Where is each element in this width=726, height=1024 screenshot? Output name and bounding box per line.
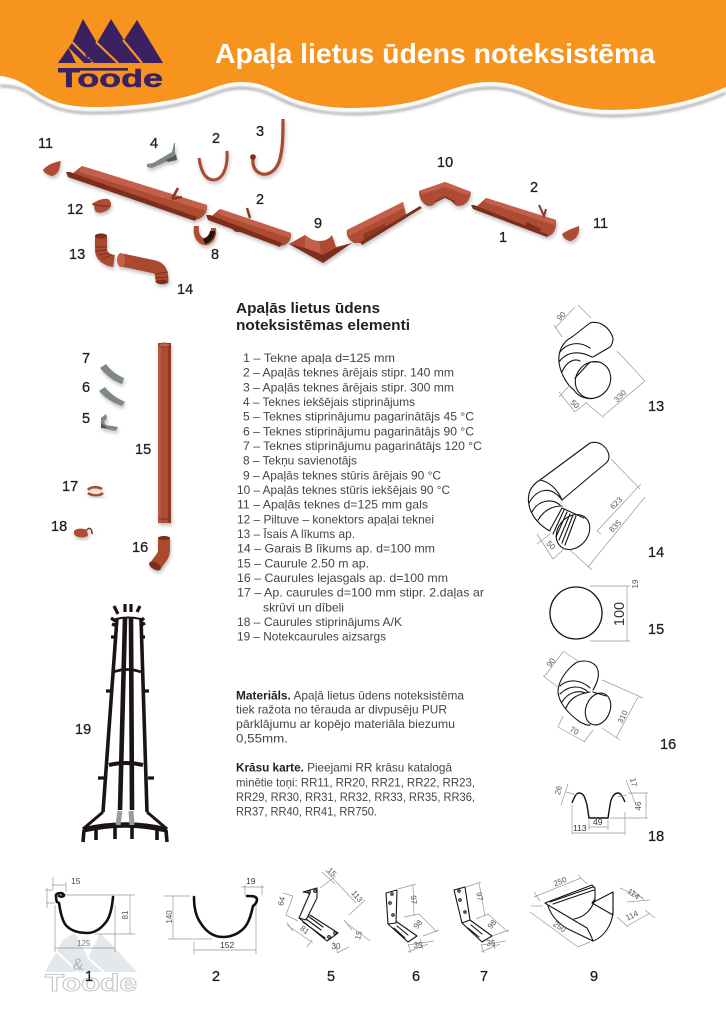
- technical drawing 18: 17: [628, 777, 639, 788]
- part number labels: left column: 17: [62, 479, 78, 495]
- technical drawing 13: 50: [568, 398, 581, 411]
- icon: connector 8: [194, 226, 216, 245]
- text block: colour chart: RR37, RR40, RR41, RR750.: [236, 805, 377, 819]
- icon: downpipe guard 19: [83, 604, 167, 842]
- icon: hook 2: [199, 151, 227, 180]
- text block: colour chart: [236, 761, 475, 819]
- technical drawing 16: 90: [545, 656, 558, 669]
- icon: pipe elbow 14: [117, 253, 168, 284]
- parts list: [237, 351, 484, 644]
- technical drawing 16: 310: [616, 708, 630, 725]
- text block: material: [236, 688, 464, 746]
- part number labels: top assembly: 3: [256, 124, 264, 140]
- profile drawing 2: 140: [165, 910, 174, 924]
- technical drawing 9: 250: [551, 919, 568, 935]
- icon: pipe outlet 16: [148, 536, 170, 572]
- technical drawing 7: 98: [486, 918, 499, 931]
- part number labels: top assembly: 11: [38, 136, 53, 152]
- technical drawing 16: [543, 651, 643, 742]
- part number 7: 7: [480, 969, 488, 985]
- part number labels: left column: 16: [132, 540, 148, 556]
- icon: gutter 2nd section: [206, 208, 291, 247]
- logo: A&M Toode: Toode: [58, 65, 163, 93]
- text block: material: pārklājumu ar kopējo materiāla biezumu: [236, 717, 455, 731]
- profile drawing 1: 15: [71, 876, 81, 886]
- part number labels: left column: [51, 351, 151, 738]
- parts list: 7 – Teknes stiprinājumu pagarinātājs 120 °C: [243, 439, 482, 453]
- technical drawing 6: 97: [409, 895, 418, 905]
- profile drawing 1: 125: [77, 939, 91, 948]
- parts list: 5 – Teknes stiprinājumu pagarinātājs 45 °C: [243, 410, 474, 424]
- part number labels: left column: 6: [82, 380, 90, 396]
- parts list: 11 – Apaļās teknes d=125 mm gals: [237, 498, 428, 512]
- heading: elements: Apaļās lietus ūdens: [236, 300, 380, 317]
- icon: pipe clamp 18: [74, 528, 92, 537]
- technical drawing 14: [528, 442, 645, 570]
- part number labels: left column: 19: [75, 722, 91, 738]
- technical drawing 5: 15: [353, 929, 364, 941]
- icon: elbow 13: [95, 233, 114, 261]
- part number labels: top assembly: 11: [593, 216, 608, 232]
- heading: elements line 2: noteksistēmas elementi: [236, 317, 410, 334]
- technical drawing 5: [276, 866, 370, 953]
- parts list: 8 – Tekņu savienotājs: [243, 454, 357, 468]
- part number labels: top assembly: 14: [177, 282, 193, 298]
- part number labels: top assembly: 1: [499, 230, 507, 246]
- technical drawing 18: [553, 777, 648, 835]
- technical drawing 9: 250: [552, 875, 568, 888]
- part number labels: left column: 18: [51, 519, 67, 535]
- parts list: 17 – Ap. caurules d=100 mm stipr. 2.daļas ar: [237, 586, 484, 600]
- technical drawing 18: 46: [634, 801, 643, 810]
- technical drawing 7: [454, 882, 509, 953]
- icon: gutter section right of corner: [347, 202, 422, 245]
- part number 14: 14: [648, 545, 664, 561]
- part number labels: left column: 5: [82, 411, 90, 427]
- technical drawing 6: 35: [414, 941, 423, 950]
- part number 6: 6: [412, 969, 420, 985]
- part number 9: 9: [590, 969, 598, 985]
- technical drawing 7: 35: [487, 939, 496, 948]
- text block: colour chart: Krāsu karte. Pieejami RR krāsu katalogā: [236, 761, 452, 775]
- icon: gutter 1 right: [471, 198, 556, 237]
- technical drawing 6: 98: [412, 918, 425, 931]
- icon: hook 3: [250, 119, 283, 174]
- icon: corner 10: [419, 182, 471, 206]
- part number 18: 18: [648, 829, 664, 845]
- part number labels: top assembly: 13: [69, 247, 85, 263]
- profile drawing 1: 81: [121, 910, 130, 919]
- technical drawing 14: 50: [544, 539, 557, 552]
- technical drawing 18: 113: [573, 823, 587, 833]
- part number 16: 16: [660, 737, 676, 753]
- technical drawing 18: 26: [553, 784, 564, 796]
- text block: material: 0,55mm.: [236, 732, 288, 746]
- profile drawing 2: [164, 876, 264, 954]
- title: Apaļa lietus ūdens noteksistēma: [215, 38, 656, 69]
- icon: long gutter: [66, 166, 207, 221]
- profile drawing 2: 19: [246, 876, 256, 886]
- technical drawing 14: 835: [607, 518, 624, 534]
- text block: colour chart: RR29, RR30, RR31, RR32, RR33, RR35, RR36,: [236, 790, 475, 804]
- parts list: 3 – Apaļās teknes ārējais stipr. 300 mm: [243, 380, 454, 394]
- technical drawing 7: 97: [474, 891, 485, 902]
- icon: gutter end 11 left: [43, 161, 61, 176]
- technical drawing 13: 330: [612, 388, 629, 404]
- parts list: 2 – Apaļās teknes ārējais stipr. 140 mm: [243, 366, 454, 380]
- part number 13: 13: [648, 399, 664, 415]
- text block: material: Materiāls. Apaļā lietus ūdens noteksistēma: [236, 688, 464, 702]
- icon: funnel 12: [92, 199, 111, 213]
- technical drawing 6: [386, 884, 439, 953]
- icon: extension bracket 7: [100, 364, 124, 384]
- part number labels: top assembly: 2: [212, 131, 220, 147]
- technical drawing 5: 64: [276, 895, 287, 907]
- technical drawing 9: 114: [624, 909, 640, 923]
- icon: inner bracket 4: [147, 143, 177, 168]
- parts list: 16 – Caurules lejasgals ap. d=100 mm: [237, 571, 448, 585]
- part number 5: 5: [327, 969, 335, 985]
- technical drawing 13: [554, 305, 645, 418]
- part number labels: left column: 15: [135, 442, 151, 458]
- parts list: 14 – Garais B līkums ap. d=100 mm: [237, 542, 435, 556]
- part number labels: top assembly: 12: [67, 202, 83, 218]
- technical drawing 15: 100: [612, 602, 628, 626]
- part number 15: 15: [648, 622, 664, 638]
- parts list: 15 – Caurule 2.50 m ap.: [237, 556, 369, 570]
- text block: colour chart: minētie toņi: RR11, RR20, RR21, RR22, RR23,: [236, 776, 475, 790]
- icon: pipe clamp 17: [88, 487, 103, 495]
- part number labels: left column: 7: [82, 351, 90, 367]
- technical drawing 5: 15: [325, 866, 338, 879]
- parts list: 9 – Apaļās teknes stūris ārējais 90 °C: [243, 468, 441, 482]
- header banner: [0, 0, 726, 116]
- profile drawing 1: [45, 876, 135, 952]
- technical drawing 9: 114: [626, 887, 642, 902]
- icon: extension bracket 6: [99, 387, 125, 406]
- technical drawing 5: 30: [332, 942, 341, 951]
- profile drawing 2: 152: [220, 940, 234, 950]
- technical drawing 5: 113: [349, 889, 365, 905]
- technical drawing 15: 19: [631, 579, 640, 588]
- logo: A&M Toode: [58, 19, 163, 93]
- icon: corner 9: [289, 235, 352, 263]
- watermark logo: &: [72, 955, 84, 974]
- technical drawing 15: [550, 579, 640, 641]
- parts list: 18 – Caurules stiprinājums A/K: [237, 615, 402, 629]
- part number labels: top assembly: 10: [437, 155, 453, 171]
- part number labels: top assembly: 8: [211, 247, 219, 263]
- icon: gutter end 11 right: [562, 226, 579, 241]
- technical drawing 16: 70: [568, 725, 581, 737]
- parts list: 1 – Tekne apaļa d=125 mm: [243, 351, 395, 365]
- part number 1: 1: [85, 969, 93, 985]
- technical drawing 13: 90: [555, 310, 568, 323]
- icon: extension bracket 5: [101, 414, 118, 431]
- technical drawing 9: [530, 875, 655, 947]
- technical drawing 5: 81: [298, 924, 311, 937]
- icon: downpipe 15: [158, 343, 171, 523]
- part number labels: top assembly: 2: [256, 192, 264, 208]
- parts list: 19 – Notekcaurules aizsargs: [237, 630, 386, 644]
- parts list: 4 – Teknes iekšējais stiprinājums: [243, 395, 415, 409]
- part number labels: top assembly: [38, 124, 608, 298]
- logo: A&M Toode: &: [83, 49, 93, 66]
- watermark logo: Toode: [45, 970, 137, 997]
- part number labels: top assembly: 9: [314, 216, 322, 232]
- watermark logo: [45, 933, 137, 997]
- parts list: skrūvi un dībeli: [263, 600, 344, 614]
- parts list: 13 – Īsais A līkums ap.: [237, 527, 355, 541]
- parts list: 12 – Piltuve – konektors apaļai teknei: [237, 512, 434, 526]
- part number labels: top assembly: 2: [530, 180, 538, 196]
- part number labels: top assembly: 4: [150, 136, 158, 152]
- parts list: 6 – Teknes stiprinājumu pagarinātājs 90 °C: [243, 424, 474, 438]
- technical drawing 18: 49: [593, 817, 603, 827]
- technical drawing 14: 623: [608, 495, 625, 511]
- parts list: 10 – Apaļās teknes stūris iekšējais 90 °C: [237, 483, 450, 497]
- part number 2: 2: [212, 969, 220, 985]
- text block: material: tiek ražota no tērauda ar divpusēju PUR: [236, 703, 447, 717]
